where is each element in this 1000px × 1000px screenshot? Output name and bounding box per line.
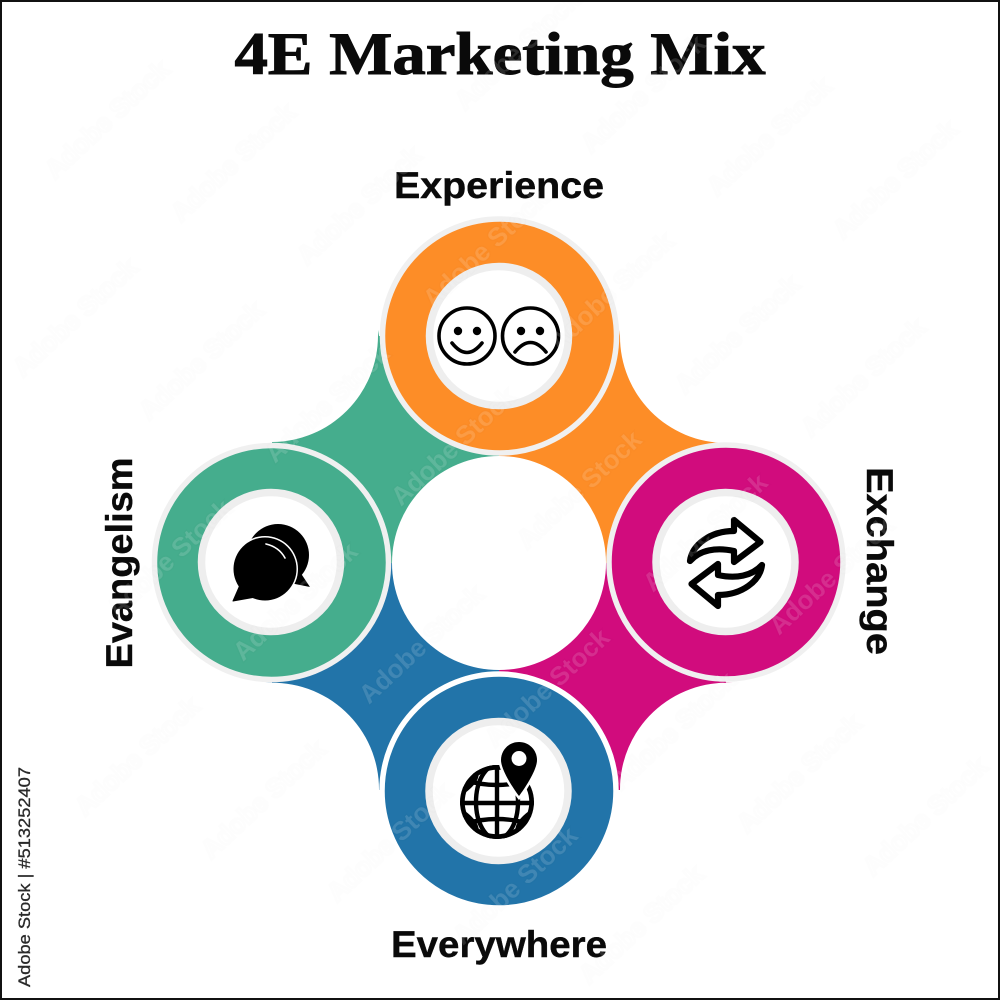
watermark pattern: Adobe Stock — [637, 467, 774, 597]
centre white circle — [392, 456, 606, 670]
icon: happy and sad faces — [439, 308, 558, 364]
watermark pattern: Adobe Stock — [701, 71, 838, 201]
watermark pattern: Adobe Stock — [543, 226, 680, 356]
watermark pattern: Adobe Stock — [69, 691, 206, 821]
watermark pattern: Adobe Stock — [763, 510, 900, 640]
watermark pattern: Adobe Stock — [447, 820, 584, 950]
watermark pattern: Adobe Stock — [575, 28, 712, 158]
ring: Exchange — [609, 445, 843, 679]
watermark pattern: Adobe Stock — [227, 536, 364, 666]
label: Evangelism: Evangelism — [99, 458, 140, 668]
label: Everywhere: Everywhere — [391, 924, 607, 965]
watermark pattern: Adobe Stock — [573, 859, 710, 989]
ring: Experience — [382, 219, 616, 453]
connector: blue — [265, 563, 499, 790]
connector: magenta — [499, 563, 733, 790]
icon: globe with location pin — [458, 742, 537, 840]
watermark pattern: Adobe Stock — [195, 734, 332, 864]
watermark pattern: Adobe Stock — [353, 579, 490, 709]
diagram: four connected quadrants — [154, 219, 843, 908]
watermark pattern: Adobe Stock — [133, 295, 270, 425]
watermark pattern: Adobe Stock — [511, 424, 648, 554]
happy face — [439, 308, 495, 364]
icon: exchange arrows — [690, 520, 762, 606]
stock credit: Adobe Stock | #513252407 — [15, 767, 34, 987]
watermark pattern: Adobe Stock — [291, 140, 428, 270]
watermark pattern: Adobe Stock — [669, 269, 806, 399]
title: 4E Marketing Mix — [234, 21, 766, 87]
ring: Evangelism — [154, 446, 388, 680]
watermark pattern: Adobe Stock — [385, 381, 522, 511]
watermark pattern: Adobe Stock — [417, 183, 554, 313]
connector: green — [272, 330, 499, 563]
watermark pattern: Adobe Stock — [731, 708, 868, 838]
watermark pattern: Adobe Stock — [795, 312, 932, 442]
watermark pattern: Adobe Stock — [165, 97, 302, 227]
connector: orange — [499, 330, 726, 563]
icon: speech bubbles — [232, 524, 310, 602]
label: Exchange: Exchange — [859, 467, 900, 655]
label: Experience: Experience — [394, 165, 604, 206]
watermark pattern: Adobe Stock — [857, 751, 994, 881]
watermark pattern: Adobe Stock — [605, 665, 742, 795]
watermark pattern: Adobe Stock — [101, 493, 238, 623]
ring: Everywhere — [382, 674, 616, 908]
sad face — [502, 308, 558, 364]
watermark pattern: Adobe Stock — [479, 622, 616, 752]
watermark pattern: Adobe Stock — [39, 54, 176, 184]
watermark pattern: Adobe Stock — [321, 777, 458, 907]
watermark pattern: Adobe Stock — [827, 114, 964, 244]
watermark pattern: Adobe Stock — [259, 338, 396, 468]
watermark pattern: Adobe Stock — [7, 252, 144, 382]
